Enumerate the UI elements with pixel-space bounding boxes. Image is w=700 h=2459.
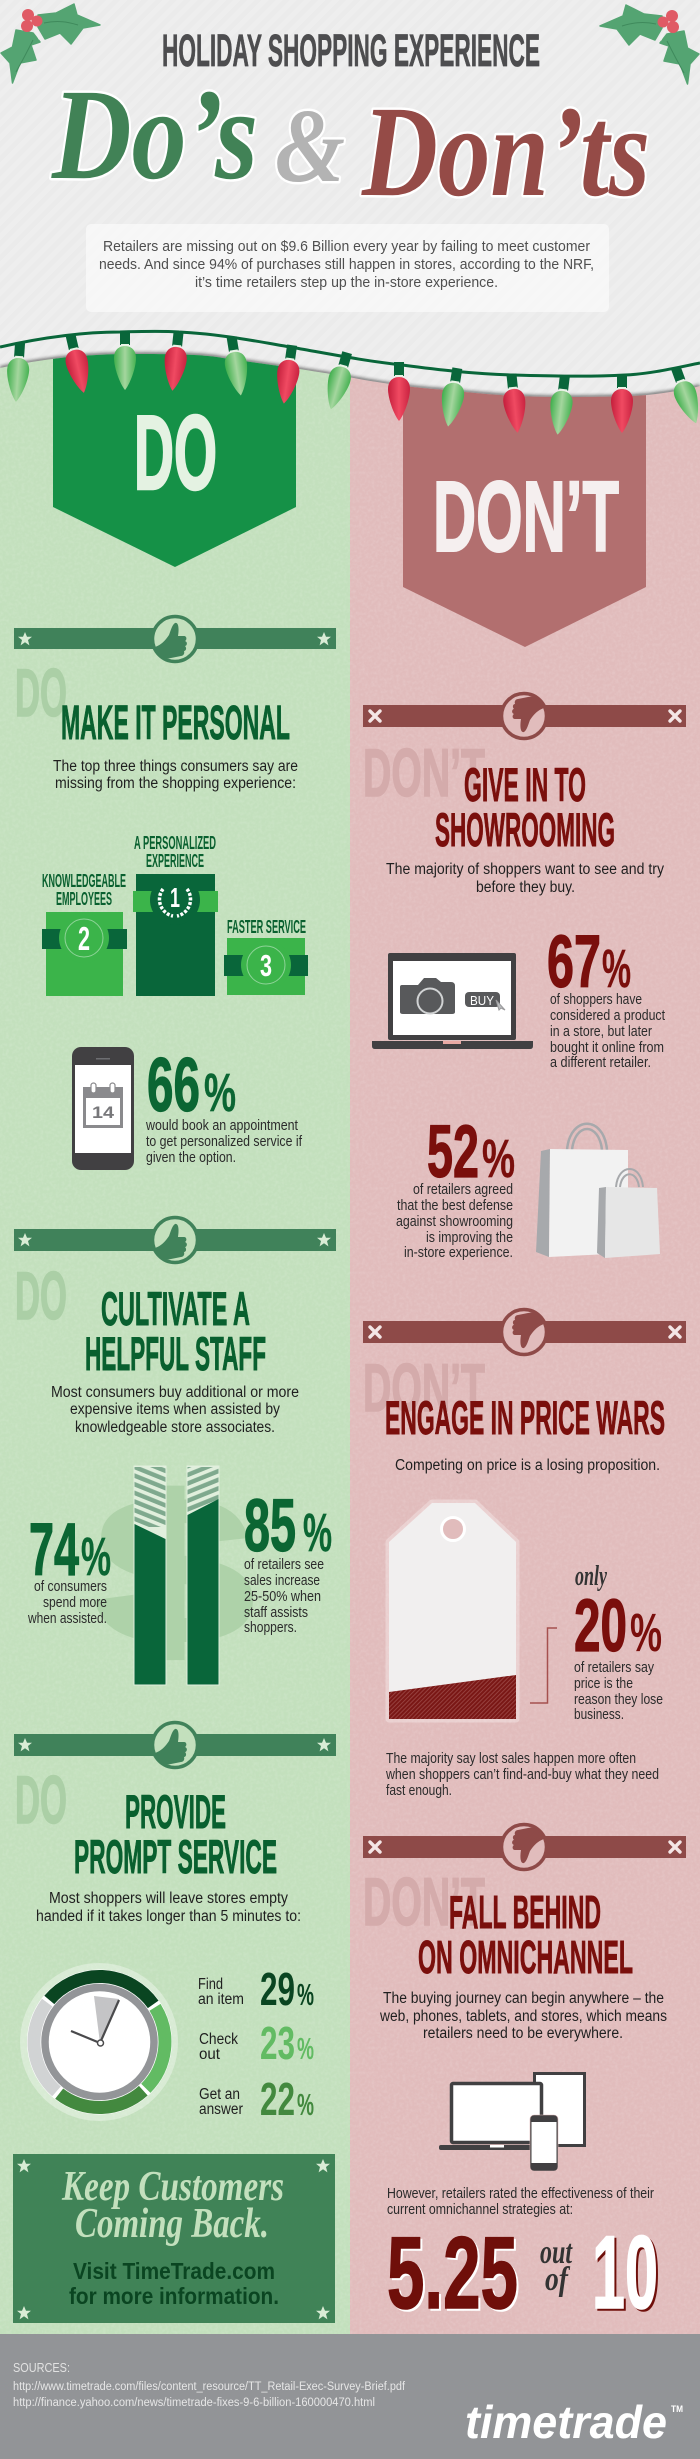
stat: 67%: 67 [547, 920, 601, 1003]
stat: 74%: spend more [43, 1595, 107, 1611]
wedge [94, 1996, 119, 2043]
panel: footer: http://www.timetrade.com/files/content_resource/TT_Retail-Exec-Survey-Brief.pdf [13, 2381, 406, 2393]
podium 3: 3 [260, 948, 272, 983]
stat: 67%: bought it online from [550, 1040, 664, 1056]
stat: get an answer: answer [199, 2101, 243, 2118]
stat: find an item: an item [198, 1991, 244, 2008]
icon: phone calendar [72, 1047, 134, 1170]
podium 2: EMPLOYEES [56, 889, 112, 909]
icon: laptop with camera [372, 953, 533, 1049]
stat: 85%: of retailers see [244, 1557, 324, 1573]
heading: fall behind on omnichannel [418, 1886, 633, 1983]
stat: 85%: staff assists [244, 1605, 308, 1621]
text: buying journey: The buying journey can begin anywhere – the [383, 1990, 664, 2007]
stat: check out [199, 2017, 314, 2069]
ghost label: DO 3: DO [15, 1762, 67, 1838]
panel: intro: needs. And since 94% of purchases still happen in stores, according to the NRF, [99, 256, 594, 273]
stat: check out: out [199, 2046, 221, 2063]
podium 1: A PERSONALIZED [134, 833, 216, 853]
icon: holly right [600, 5, 699, 84]
podium 3 [224, 917, 308, 995]
text: most shoppers: handed if it takes longer than 5 minutes to: [36, 1908, 301, 1925]
text: majority say: fast enough. [386, 1783, 452, 1799]
stat: find an item: Find [198, 1976, 223, 1993]
stat: get an answer: % [297, 2087, 314, 2122]
banner: DO: DO [134, 394, 217, 512]
divider: do 1 [14, 616, 336, 662]
text: however: current omnichannel strategies at: [387, 2202, 573, 2218]
icon: shopping bags [536, 1124, 660, 1258]
logo: timetrade: timetrade [465, 2396, 667, 2448]
text: buying journey: retailers need to be everywhere. [423, 2025, 623, 2042]
divider: don't 1 [363, 694, 686, 738]
stat: 20%: 20 [574, 1584, 627, 1667]
stat: 20%: only [575, 1561, 607, 1592]
text: however: However, retailers rated the effectiveness of their [387, 2186, 654, 2202]
chart: podium [42, 833, 308, 996]
stat: 20%: of retailers say [574, 1660, 655, 1676]
stat: 66%: to get personalized service if [146, 1134, 303, 1150]
stat: 85%: sales increase [244, 1573, 320, 1589]
podium 1: EXPERIENCE [146, 851, 204, 871]
text: MAKE IT PERSONAL [61, 697, 290, 750]
stat: 74%: % [81, 1527, 111, 1587]
podium 2 [42, 871, 127, 996]
podium 2: KNOWLEDGEABLE [42, 871, 126, 891]
text: majority say [385, 1751, 659, 1799]
ghost: dollar sign: $ [93, 1453, 255, 1688]
text: top three: missing from the shopping experience: [55, 775, 296, 792]
text: most consumers: Most consumers buy additional or more [51, 1384, 299, 1401]
text: majority of shoppers: The majority of shoppers want to see and try [386, 861, 664, 878]
stat: 52%: of retailers agreed [413, 1182, 513, 1198]
heading: give in to showrooming [435, 758, 615, 856]
stat: get an answer: Get an [199, 2086, 240, 2103]
stat: 85%: 25-50% when [244, 1589, 321, 1605]
stat: find an item: 29 [260, 1963, 295, 2015]
banner: DO [53, 340, 296, 567]
panel: footer: SOURCES: [13, 2360, 70, 2375]
stat: 66% [145, 1043, 303, 1166]
wave shadow [0, 354, 700, 397]
podium 2: 2 [78, 920, 90, 957]
stat: 5.25 out of 10: out [540, 2234, 573, 2271]
stat: 66%: 66 [147, 1043, 200, 1128]
stat: 52%: that the best defense [397, 1198, 513, 1214]
heading: cultivate a helpful staff: CULTIVATE A [101, 1282, 250, 1335]
heading: Do's and Don'ts: Do’s [51, 63, 258, 207]
callout: keep customers: Visit TimeTrade.com [73, 2258, 275, 2284]
text: buying journey: web, phones, tablets, and stores, which means [379, 2008, 667, 2025]
callout: keep customers: for more information. [69, 2283, 279, 2309]
ghost label: DO 1: DO [15, 655, 67, 731]
stat: 52%: is improving the [426, 1230, 513, 1246]
stat: 85%: % [303, 1503, 332, 1563]
podium 3: FASTER SERVICE [227, 917, 306, 937]
ghost label: DON'T 1: DON’T [363, 735, 485, 811]
stat: 67%: of shoppers have [550, 992, 642, 1008]
stat: 74% [27, 1508, 111, 1627]
ghost label: DON'T 3: DON’T [363, 1864, 485, 1940]
text: most consumers [51, 1384, 299, 1436]
text: competing on price: Competing on price is a losing proposition. [395, 1457, 660, 1474]
podium 1: 1 [170, 882, 180, 913]
stat: 52%: 52 [427, 1110, 479, 1193]
text: most shoppers: Most shoppers will leave stores empty [49, 1890, 288, 1907]
panel: intro [86, 224, 609, 312]
icon: holly left [1, 4, 100, 83]
callout: keep customers: Coming Back. [75, 2201, 269, 2247]
banner: DON'T [403, 386, 646, 647]
text: majority say: when shoppers can’t find-and-buy what they need [385, 1767, 659, 1783]
text: most consumers: knowledgeable store associates. [75, 1419, 275, 1436]
panel: intro: it’s time retailers step up the in-store experience. [195, 274, 498, 291]
panel: footer: http://finance.yahoo.com/news/timetrade-fixes-9-6-billion-160000470.html [13, 2397, 375, 2409]
string of lights [0, 331, 700, 436]
text: however [387, 2186, 654, 2218]
stat: get an answer [199, 2073, 314, 2125]
heading: provide prompt service [74, 1785, 277, 1883]
stat: 67%: % [602, 939, 631, 999]
text: majority of shoppers [386, 861, 664, 896]
ghost label: DON'T 2: DON’T [363, 1350, 485, 1426]
stat: 67%: considered a product [550, 1008, 665, 1024]
stat: 74%: when assisted. [27, 1611, 107, 1627]
stat: check out: % [297, 2031, 314, 2066]
callout: keep customers: Keep Customers [61, 2164, 284, 2210]
stat: 5.25 out of 10: of [545, 2261, 571, 2298]
stat: 52%: in-store experience. [404, 1245, 513, 1261]
icon: laptop with camera: BUY [470, 994, 495, 1008]
stat: check out: 23 [260, 2017, 295, 2069]
stat: 20%: business. [574, 1707, 624, 1723]
stat: check out: Check [199, 2031, 238, 2048]
stat: 5.25 out of 10: 5.25 [389, 2218, 520, 2332]
stat: 85%: shoppers. [244, 1620, 297, 1636]
stat: 52%: against showrooming [396, 1214, 513, 1230]
panel: intro: Retailers are missing out on $9.6 Billion every year by failing to meet customer [103, 238, 590, 255]
stat: 20%: price is the [574, 1676, 633, 1692]
stat: 5.25 out of 10: 5.25 [387, 2216, 518, 2330]
bar 85% [186, 1466, 220, 1686]
icon: devices [439, 2074, 584, 2171]
text: top three [53, 758, 298, 792]
logo: timetrade: TM [671, 2404, 683, 2414]
heading: Do's and Don'ts: & [275, 87, 345, 204]
stat: 20% [574, 1561, 663, 1723]
bar 74% [134, 1466, 166, 1686]
text: top three: The top three things consumers say are [53, 758, 298, 775]
text: buying journey [379, 1990, 667, 2042]
ghost label: DO 2: DO [15, 1258, 67, 1334]
text: majority say: The majority say lost sales happen more often [386, 1751, 636, 1767]
stat: 85% [244, 1484, 332, 1636]
stat: 74%: of consumers [34, 1579, 107, 1595]
stat: 52% [396, 1110, 515, 1261]
divider: don't 3 [363, 1824, 686, 1870]
heading: cultivate a helpful staff [85, 1282, 266, 1380]
chart: paired bars [134, 1466, 220, 1686]
stat: 20%: % [630, 1603, 662, 1663]
heading: provide prompt service: PROVIDE [125, 1785, 226, 1838]
stat: get an answer: 22 [260, 2073, 295, 2125]
stat: find an item: % [297, 1977, 314, 2012]
stat: 66%: would book an appointment [145, 1118, 298, 1134]
text: HELPFUL STAFF [85, 1327, 266, 1380]
chart: clock donut [20, 1963, 178, 2121]
divider: do 3 [14, 1722, 336, 1768]
stat: 67% [547, 920, 665, 1071]
bracket [530, 1628, 557, 1703]
text: most shoppers [36, 1890, 301, 1925]
podium 1 [133, 833, 218, 996]
stat: 52%: % [482, 1129, 515, 1189]
stat: 66%: % [204, 1063, 236, 1123]
panel: footer [0, 2334, 700, 2459]
divider: do 2 [14, 1218, 336, 1262]
text: most consumers: expensive items when assisted by [70, 1401, 280, 1418]
text: majority of shoppers: before they buy. [476, 879, 575, 896]
stat: 85%: 85 [244, 1484, 296, 1567]
heading: Do's and Don'ts [51, 63, 650, 224]
text: PROMPT SERVICE [74, 1830, 277, 1883]
stat: 67%: a different retailer. [550, 1055, 651, 1071]
stat: 67%: in a store, but later [550, 1024, 652, 1040]
stat: find an item [198, 1963, 314, 2015]
stat: 20%: reason they lose [574, 1692, 663, 1708]
icon: phone calendar: 14 [92, 1103, 115, 1122]
callout: keep customers [13, 2154, 335, 2323]
icon: price tag [389, 1503, 516, 1719]
stat: 74%: 74 [29, 1508, 79, 1591]
stat: 66%: given the option. [146, 1150, 236, 1166]
divider: don't 2 [363, 1310, 686, 1354]
